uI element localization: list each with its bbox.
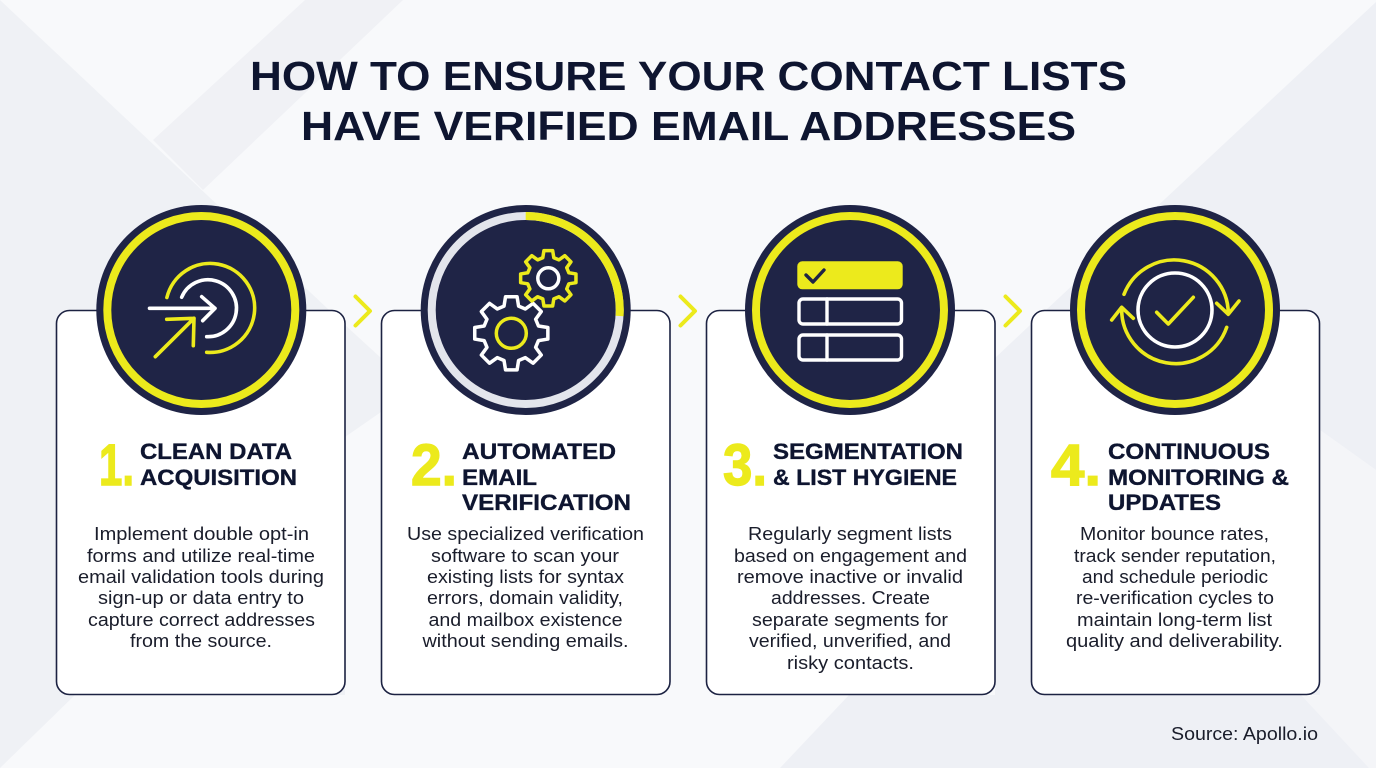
step 3 number: 3. <box>723 433 767 498</box>
step 2 description: errors, domain validity, <box>427 588 623 608</box>
step 2 heading: VERIFICATION <box>462 490 631 515</box>
step 1 description: Implement double opt-in <box>94 524 309 544</box>
step 4 description: Monitor bounce rates, <box>1080 524 1269 544</box>
step 3 description: Regularly segment lists <box>748 524 952 544</box>
step 4 description: and schedule periodic <box>1082 567 1268 587</box>
step 2 heading: AUTOMATED <box>462 439 616 464</box>
step 4 description: track sender reputation, <box>1074 546 1276 566</box>
step 4 heading: UPDATES <box>1108 490 1221 515</box>
step 3 description <box>734 524 967 673</box>
arrow: step 2 to 3 <box>680 296 695 326</box>
step 4 number: 4. <box>1051 433 1101 498</box>
source credit: Source: Apollo.io <box>1171 724 1318 744</box>
icon: inbound arrows with target arcs <box>96 205 306 415</box>
icon: segmented list with check <box>745 205 955 415</box>
step 3 heading: SEGMENTATION <box>773 439 963 464</box>
icon: gears with progress ring <box>421 205 631 415</box>
step 2 description: existing lists for syntax <box>427 567 624 587</box>
arrow: step 3 to 4 <box>1006 296 1020 326</box>
step 2 heading <box>462 439 631 515</box>
step 3 description: verified, unverified, and <box>749 631 951 651</box>
step 4 heading <box>1108 439 1289 515</box>
icon: refresh cycle with check <box>1070 205 1280 415</box>
step 3 description: separate segments for <box>752 610 948 630</box>
step 1 description: from the source. <box>130 631 272 651</box>
step 4 description: re-verification cycles to <box>1076 588 1274 608</box>
step 3 description: risky contacts. <box>787 653 914 673</box>
title <box>250 53 1127 149</box>
step 2 description: without sending emails. <box>421 631 628 651</box>
step 1 description: sign-up or data entry to <box>98 588 304 608</box>
step 3 heading: & LIST HYGIENE <box>773 465 957 490</box>
card 3 background <box>706 310 995 694</box>
step 1 description: forms and utilize real-time <box>87 546 315 566</box>
step 1 description: capture correct addresses <box>88 610 315 630</box>
card 1 background <box>56 310 345 694</box>
step 4 description <box>1066 524 1283 651</box>
card 4 background <box>1032 310 1320 694</box>
step 1 heading <box>140 439 297 490</box>
step 2 description: software to scan your <box>431 546 619 566</box>
step 4 description: quality and deliverability. <box>1066 631 1283 651</box>
panel: step 1 clean data acquisition <box>56 205 345 694</box>
step 3 description: remove inactive or invalid <box>737 567 963 587</box>
panel: step 4 continuous monitoring and updates <box>1032 205 1320 694</box>
step 3 heading <box>773 439 963 490</box>
step 1 heading: ACQUISITION <box>140 465 297 490</box>
step 2 number: 2. <box>411 433 457 498</box>
step 2 description <box>407 524 644 651</box>
step 1 description: email validation tools during <box>78 567 324 587</box>
step 1 heading: CLEAN DATA <box>140 439 292 464</box>
card 2 background <box>382 310 670 694</box>
step 1 description <box>78 524 324 651</box>
step 1 number: 1. <box>99 433 134 498</box>
step 4 description: maintain long-term list <box>1077 610 1272 630</box>
panel: step 2 automated email verification <box>382 205 670 694</box>
step 4 heading: MONITORING & <box>1108 465 1289 490</box>
step 2 description: and mailbox existence <box>428 610 622 630</box>
arrow: step 1 to 2 <box>356 296 370 326</box>
step 3 description: addresses. Create <box>771 588 930 608</box>
step 4 heading: CONTINUOUS <box>1108 439 1270 464</box>
step 2 heading: EMAIL <box>462 465 537 490</box>
panel: step 3 segmentation and list hygiene <box>706 205 995 694</box>
step 3 description: based on engagement and <box>734 546 967 566</box>
title: HAVE VERIFIED EMAIL ADDRESSES <box>301 103 1076 149</box>
step 2 description: Use specialized verification <box>407 524 644 544</box>
title: HOW TO ENSURE YOUR CONTACT LISTS <box>250 53 1127 99</box>
